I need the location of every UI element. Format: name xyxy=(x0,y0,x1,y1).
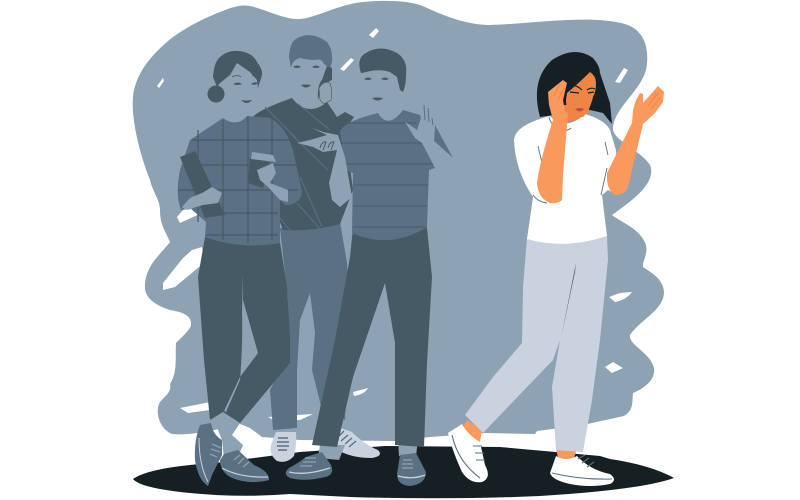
left woman legs xyxy=(198,237,290,423)
woman rear ankle xyxy=(462,420,482,442)
left woman gap between legs xyxy=(224,273,258,412)
middle man face features xyxy=(293,66,320,88)
right man shoe right xyxy=(397,453,426,486)
middle man legs xyxy=(270,222,350,430)
middle man shoe right xyxy=(336,428,380,458)
right man face features xyxy=(364,78,389,100)
left woman forearm holding folder xyxy=(182,187,222,210)
coffee cup xyxy=(248,152,276,188)
left woman face features xyxy=(232,76,258,103)
left woman bun xyxy=(208,86,224,102)
woman front shoe xyxy=(550,455,614,486)
left woman shoe raised xyxy=(195,423,222,486)
woman hair xyxy=(537,52,612,124)
middle man shoe left xyxy=(271,432,296,462)
white flecks xyxy=(157,28,632,421)
middle man rear hair xyxy=(318,66,332,100)
right man legs xyxy=(312,228,432,447)
middle man xyxy=(253,35,380,462)
troubled woman xyxy=(448,52,664,486)
woman open hand arm xyxy=(607,86,664,195)
woman face xyxy=(566,72,596,117)
middle man shirt xyxy=(253,98,354,230)
left woman socks xyxy=(214,412,243,458)
right man socks xyxy=(318,440,418,460)
woman neck xyxy=(560,105,590,122)
left woman shirt xyxy=(178,116,302,245)
left woman hand and arm on cup xyxy=(257,163,288,202)
right man hair xyxy=(359,48,406,92)
left woman xyxy=(178,51,302,486)
right man shirt xyxy=(340,110,435,240)
left woman hair xyxy=(213,51,262,88)
woman shirt xyxy=(514,114,618,244)
middle man hair xyxy=(289,35,332,68)
woman rear shoe xyxy=(448,424,488,482)
ground shadow xyxy=(133,446,674,498)
right man shoe left xyxy=(286,452,332,480)
middle man pointing arm xyxy=(297,128,352,207)
right man xyxy=(286,48,460,486)
left woman folder xyxy=(180,151,225,218)
right man waving hand xyxy=(405,105,460,175)
left woman shoe planted xyxy=(220,450,269,482)
background blob xyxy=(133,1,664,441)
right man sleeve triangle xyxy=(434,125,453,158)
woman front ankle xyxy=(556,448,577,460)
woman raised arm on head xyxy=(537,80,568,203)
woman face features xyxy=(568,85,595,112)
woman legs xyxy=(465,236,608,452)
middle man hand at ear xyxy=(319,82,332,104)
